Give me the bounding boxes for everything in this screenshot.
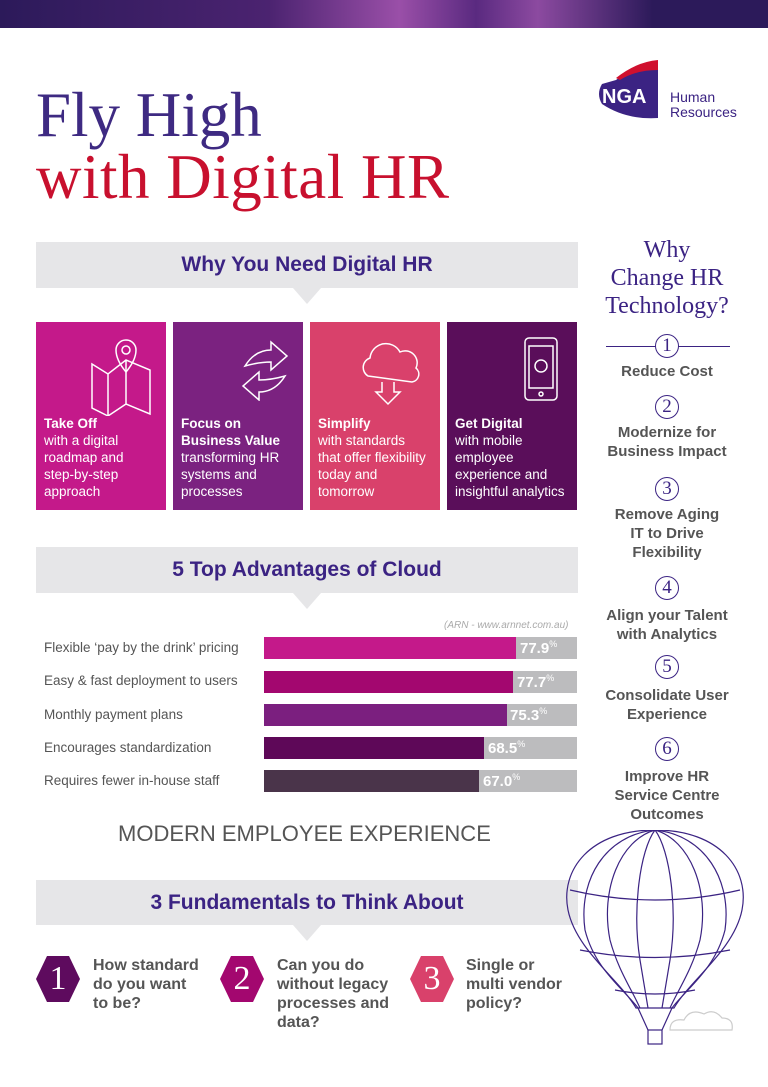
fundamental 2: 2 <box>234 960 250 997</box>
card: Take Off: with a digital roadmap and step-by-step approach <box>44 433 124 499</box>
fundamental 1: do you want <box>93 976 186 993</box>
card: Take Off: Take Off <box>44 416 97 431</box>
icon: hot air balloon <box>566 830 744 1045</box>
fundamental 3: Single or <box>466 957 534 974</box>
icon: map <box>91 339 151 416</box>
card: Simplify: with standards that offer flexibility today and tomorrow <box>318 433 426 499</box>
bar chart: Easy & fast deployment to users <box>44 673 238 688</box>
reason 1: Reduce Cost <box>621 363 713 380</box>
heading: 3 Fundamentals <box>36 880 578 925</box>
fundamental 1: 1 <box>50 960 66 997</box>
fundamental 2: processes and <box>277 995 389 1012</box>
fundamental 3: multi vendor <box>466 976 562 993</box>
fundamental 2: Can you do <box>277 957 364 974</box>
card: Focus on Business Value <box>173 322 303 510</box>
bar chart: Requires fewer in-house staff <box>44 773 219 788</box>
heading: 3 Fundamentals: 3 Fundamentals to Think About <box>150 891 464 914</box>
fundamental 3: policy? <box>466 995 522 1012</box>
card: Get Digital: with mobile employee experience and insightful analytics <box>455 433 565 499</box>
card: Get Digital: Get Digital <box>455 416 523 431</box>
reason 6: Improve HR <box>625 768 709 785</box>
heading: 5 Top Advantages of Cloud: 5 Top Advantages of Cloud <box>172 558 442 581</box>
reason 1 <box>621 334 713 380</box>
reason 4 <box>606 576 728 643</box>
reason 3: 3 <box>662 478 672 499</box>
logo: Resources <box>670 104 737 120</box>
right column title: Why <box>644 237 690 263</box>
reason 5: Experience <box>627 706 707 723</box>
logo <box>599 60 737 120</box>
card: Simplify: Simplify <box>318 416 371 431</box>
bar chart: 77.9% <box>520 639 557 657</box>
reason 5 <box>605 655 729 723</box>
fundamental 2: without legacy <box>277 976 388 993</box>
right column title: Change HR <box>611 265 723 291</box>
fundamental 3: 3 <box>424 960 440 997</box>
reason 4: 4 <box>662 577 672 598</box>
right column title: Technology? <box>605 293 729 319</box>
title: Fly High <box>36 80 262 150</box>
bar chart <box>44 637 577 792</box>
bar chart: Encourages standardization <box>44 740 211 755</box>
reason 2: Business Impact <box>607 443 727 460</box>
card: Get Digital <box>447 322 577 510</box>
card: Take Off <box>36 322 166 510</box>
fundamental 1: How standard <box>93 957 199 974</box>
reason 6 <box>614 737 720 823</box>
bar chart: 77.7% <box>517 673 554 691</box>
reason 3: IT to Drive <box>630 525 704 542</box>
bar chart: 68.5% <box>488 739 525 757</box>
reason 3: Flexibility <box>632 544 702 561</box>
reason 1: 1 <box>662 335 672 356</box>
reason 6: Service Centre <box>614 787 720 804</box>
reason 3 <box>615 477 719 561</box>
fundamental 1 <box>36 956 199 1012</box>
reason 2: Modernize for <box>618 424 716 441</box>
reason 4: Align your Talent <box>606 607 728 624</box>
reason 5: 5 <box>662 656 672 677</box>
reason 2 <box>607 395 727 460</box>
reason 4: with Analytics <box>617 626 717 643</box>
reason 2: 2 <box>662 396 672 417</box>
fundamental 2: data? <box>277 1014 320 1031</box>
reason 3: Remove Aging <box>615 506 719 523</box>
reason 6: 6 <box>662 738 672 759</box>
title <box>36 80 450 212</box>
bar chart: 67.0% <box>483 772 520 790</box>
bar chart: 75.3% <box>510 706 547 724</box>
card: Simplify <box>310 322 440 510</box>
logo: Human <box>670 89 715 105</box>
heading: Why You Need Digital HR <box>36 242 578 288</box>
subheading: modern employee experience: MODERN EMPLOYEE EXPERIENCE <box>118 821 491 846</box>
title: with Digital HR <box>36 142 450 212</box>
bar chart: Flexible ‘pay by the drink’ pricing <box>44 640 239 655</box>
source note: (ARN - www.arnnet.com.au) <box>444 620 568 631</box>
fundamental 1: to be? <box>93 995 141 1012</box>
logo: NGA <box>602 86 646 108</box>
right column title <box>605 237 729 319</box>
icon: arrows <box>242 340 288 401</box>
card: Focus on Business Value: Focus on Business Value <box>181 416 280 448</box>
fundamental 3 <box>410 956 562 1012</box>
top banner <box>0 0 768 28</box>
reason 6: Outcomes <box>630 806 704 823</box>
fundamental 2 <box>220 956 389 1031</box>
card: Focus on Business Value: transforming HR systems and processes <box>181 450 279 499</box>
heading: 5 Top Advantages of Cloud <box>36 547 578 593</box>
reason 5: Consolidate User <box>605 687 729 704</box>
icon: cloud <box>362 342 420 405</box>
bar chart: Monthly payment plans <box>44 707 183 722</box>
divider lines near 1 <box>606 346 730 347</box>
heading: Why You Need Digital HR: Why You Need Digital HR <box>181 253 433 276</box>
icon: phone <box>524 337 558 401</box>
